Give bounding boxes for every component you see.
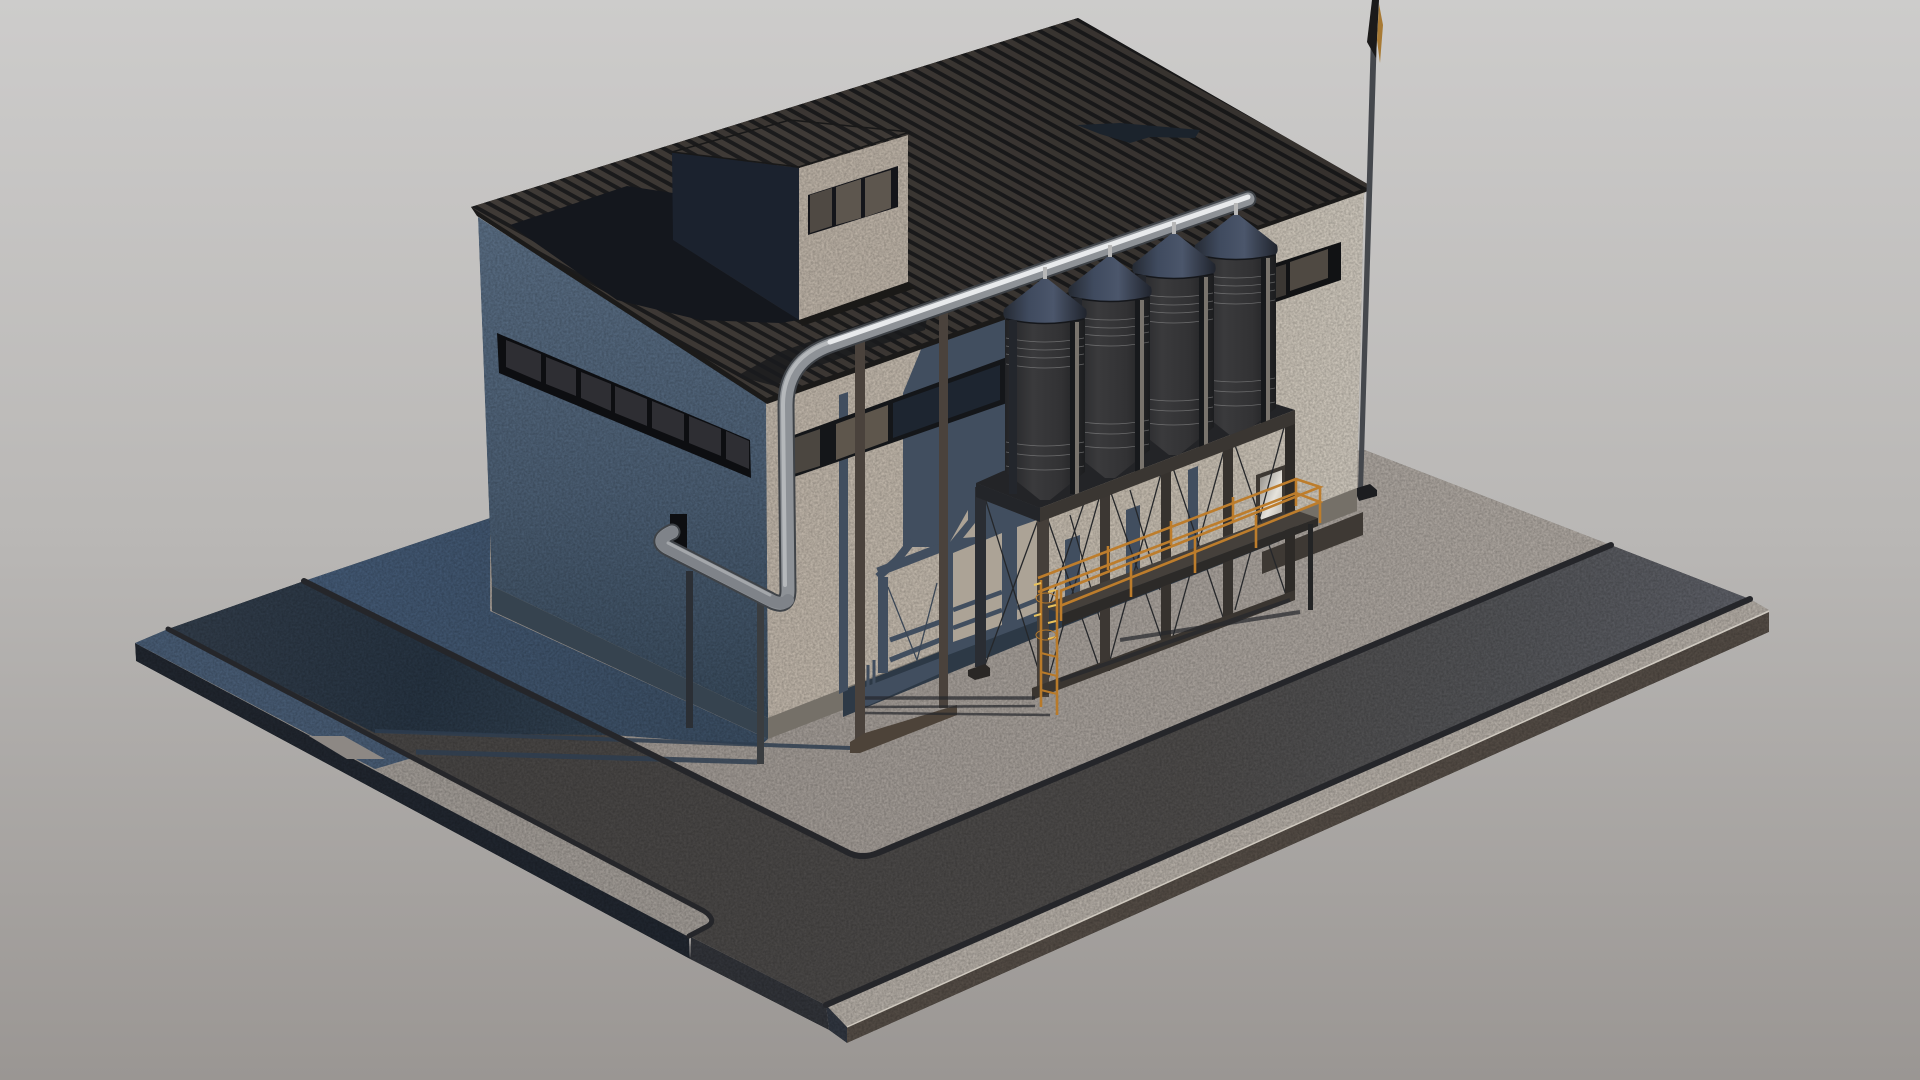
dormer base flashing xyxy=(799,282,916,326)
pipe shadow on roof xyxy=(737,300,930,386)
lit patches between shadows xyxy=(950,510,1037,642)
left sidewalk xyxy=(135,629,712,937)
support poles xyxy=(686,308,957,764)
building xyxy=(471,18,1371,739)
front wall xyxy=(766,186,1371,718)
cast frame shadow on wall xyxy=(868,541,940,695)
ladder xyxy=(1034,580,1057,715)
curbs xyxy=(168,545,1750,1005)
right window band xyxy=(1273,242,1341,303)
silo 1 xyxy=(1003,267,1087,500)
flagpole xyxy=(1357,0,1383,501)
front plinth xyxy=(768,488,1357,739)
plinth in shadow xyxy=(843,518,1280,717)
deck outer post xyxy=(1308,524,1313,610)
side step xyxy=(1262,512,1363,574)
platform frame xyxy=(968,410,1295,700)
silo 2 xyxy=(1068,245,1152,478)
left wall in shade xyxy=(478,217,768,718)
building cast shadow bands on ground xyxy=(375,731,850,762)
left window band xyxy=(497,333,751,478)
silo 3 xyxy=(1132,222,1216,455)
ground shadow of frame xyxy=(865,600,1300,715)
shadow bars on lit patches xyxy=(953,592,1037,628)
base beam xyxy=(1032,590,1295,700)
roof xyxy=(471,18,1371,404)
flagpole shadow on roof xyxy=(1077,123,1200,143)
pole base xyxy=(1357,484,1377,501)
base plates xyxy=(968,664,990,680)
dormer xyxy=(672,120,916,326)
top beams xyxy=(976,410,1295,522)
front sidewalk xyxy=(826,599,1769,1027)
concrete yard xyxy=(304,450,1611,857)
dormer left face xyxy=(672,152,799,320)
main pipe xyxy=(662,197,1248,603)
thin bracing shadow on wall xyxy=(888,583,937,660)
road xyxy=(168,545,1750,1005)
platform frame rear xyxy=(976,401,1295,508)
silo 4 xyxy=(1194,203,1278,436)
walkway xyxy=(1034,479,1320,715)
dormer right face xyxy=(799,135,908,320)
deck fascia xyxy=(1062,518,1318,626)
ground slab xyxy=(135,450,1769,1043)
railings xyxy=(1038,479,1320,621)
front window band xyxy=(794,356,1010,477)
roof shadow xyxy=(510,186,799,323)
left plinth xyxy=(492,586,768,739)
shaded road xyxy=(168,581,612,735)
slab side faces xyxy=(135,612,1769,1043)
sidewalk highlight edge xyxy=(847,611,1769,1027)
pole base bar xyxy=(850,705,957,753)
columns xyxy=(975,419,1295,697)
lit patch on sidewalk xyxy=(309,736,385,759)
rear-lit door panel xyxy=(1256,465,1285,525)
shaded yard xyxy=(304,518,768,746)
wall shadows xyxy=(839,300,1198,707)
shaded sidewalk xyxy=(135,629,412,769)
cross bracing xyxy=(985,420,1286,680)
deck surface xyxy=(1040,510,1318,614)
dormer window xyxy=(808,166,898,235)
flag xyxy=(1367,0,1383,63)
dormer roof xyxy=(672,120,910,167)
